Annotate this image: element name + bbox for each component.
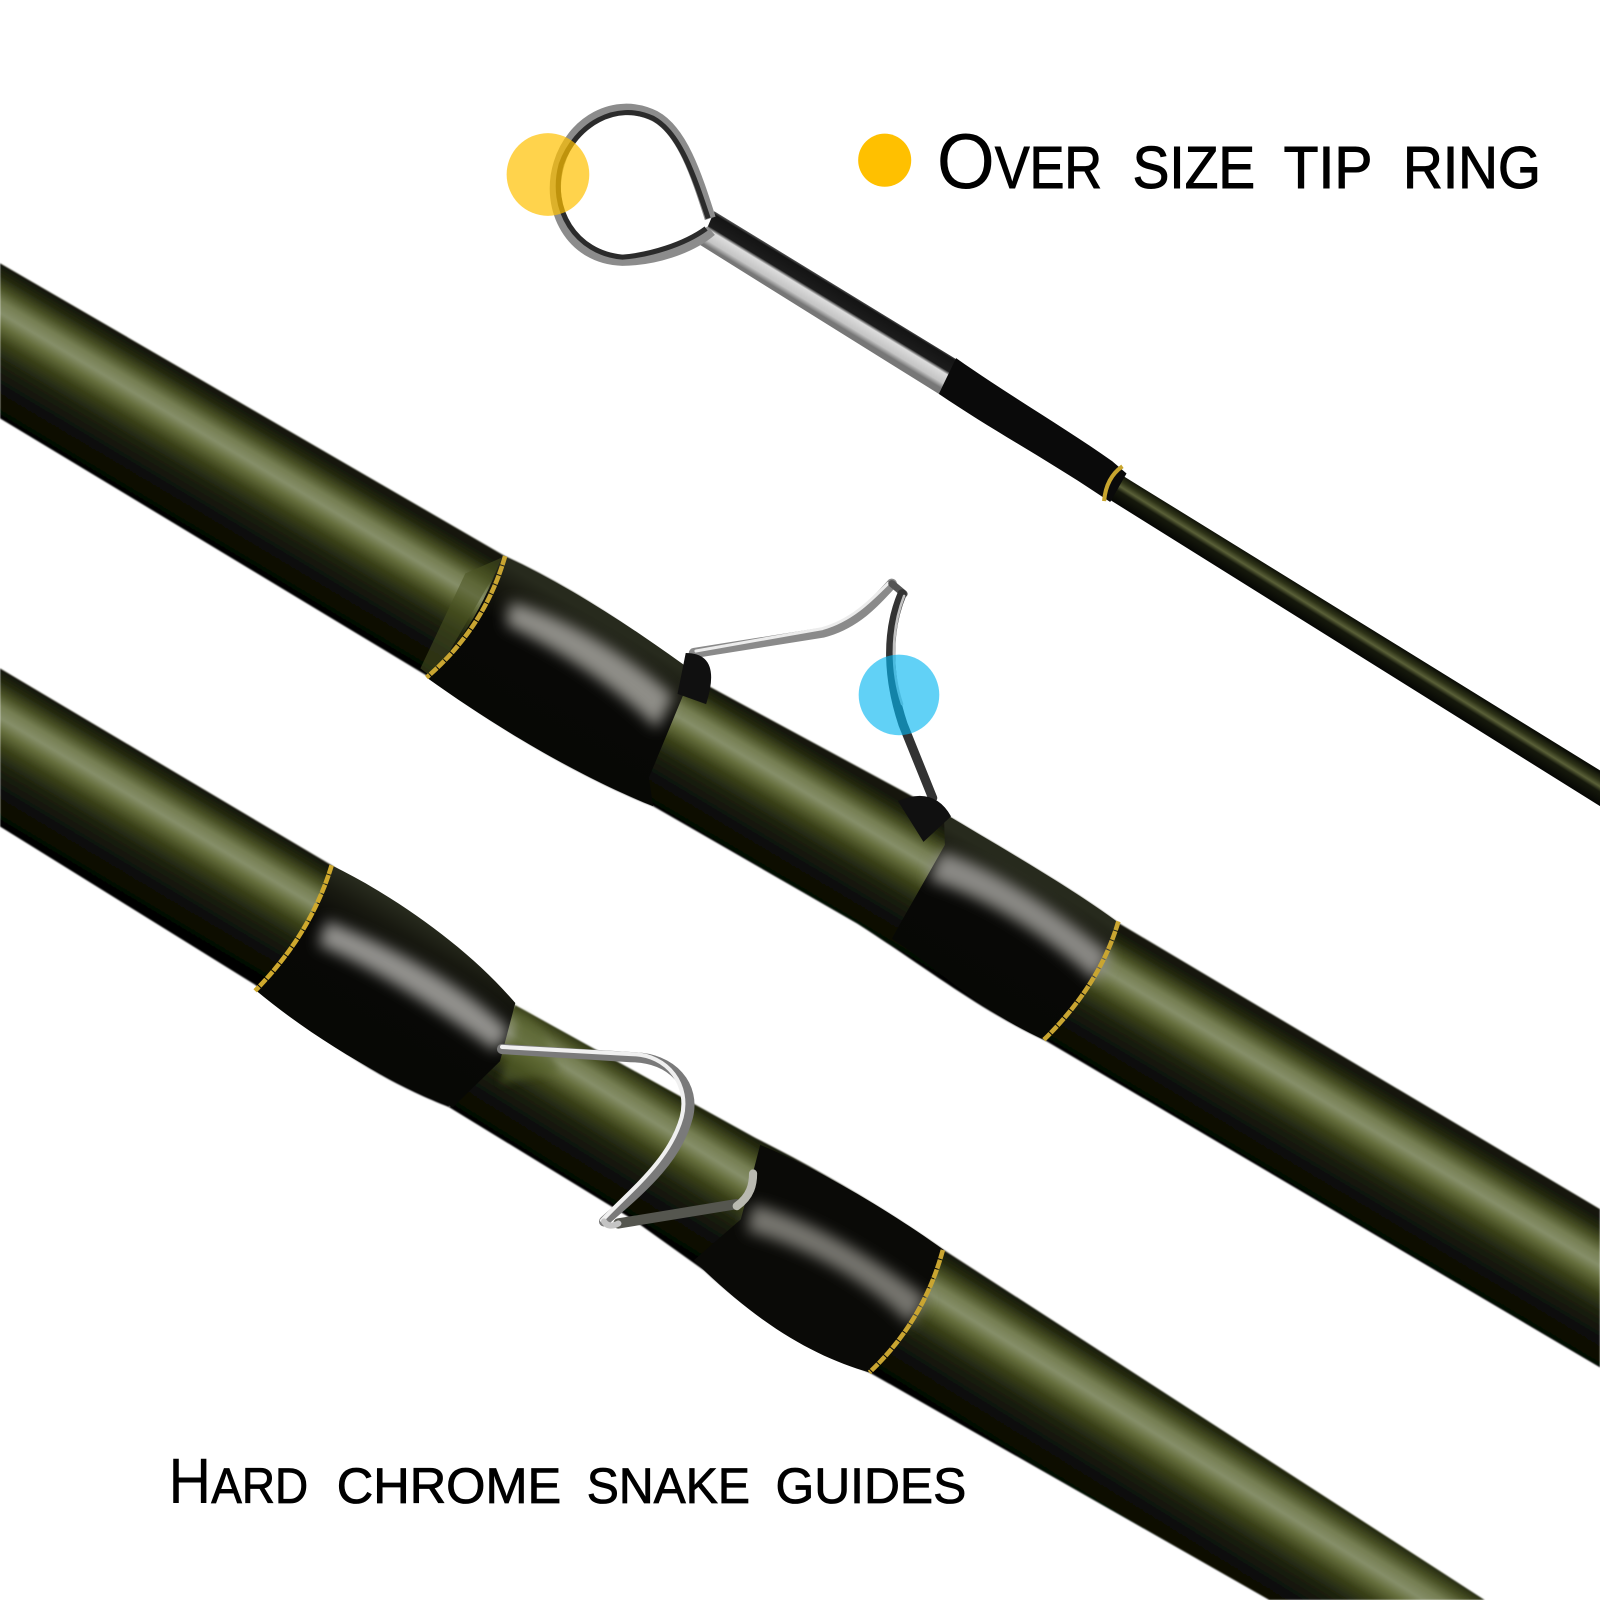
snake guide xyxy=(502,1047,753,1226)
black wrap one xyxy=(427,556,696,806)
black wrap four xyxy=(694,1145,944,1372)
label: over size tip ring: size xyxy=(1133,112,1255,206)
label: hard chrome snake guides: H xyxy=(168,1445,211,1517)
label: over size tip ring: tip xyxy=(1284,112,1372,206)
tip ring xyxy=(555,109,711,260)
label: over size tip ring: O xyxy=(937,119,995,205)
label: hard chrome snake guides: ard xyxy=(211,1439,308,1519)
wrap two highlight xyxy=(929,851,1110,982)
label: over size tip ring: ring xyxy=(1403,112,1541,206)
guide stem xyxy=(700,211,956,394)
rod blank right xyxy=(449,1005,1485,1600)
thin rod blank xyxy=(1110,476,1600,806)
black wrap two xyxy=(892,813,1119,1040)
label: over size tip ring: ver xyxy=(995,112,1102,206)
wrap one highlight xyxy=(506,602,673,729)
label: hard chrome snake guides: guides xyxy=(776,1439,966,1519)
lower rod section xyxy=(0,668,1485,1600)
olive patch beside wrap three xyxy=(500,1012,559,1084)
tip section of rod with oversize ring xyxy=(555,109,1600,806)
snake guide xyxy=(694,584,933,798)
black wrap three xyxy=(255,865,515,1107)
gold band four xyxy=(869,1250,943,1372)
olive underwrap left xyxy=(420,556,505,679)
middle rod section xyxy=(0,263,1600,1367)
label: hard chrome snake guides: chrome xyxy=(337,1439,561,1519)
label: hard chrome snake guides: snake xyxy=(587,1439,750,1519)
gold band one xyxy=(427,556,505,678)
marker: tip ring xyxy=(507,133,589,216)
gold band xyxy=(1104,466,1122,501)
rod blank xyxy=(0,263,1600,1367)
gold band two xyxy=(1044,921,1118,1040)
gold band three xyxy=(255,865,332,991)
guide glue feet xyxy=(678,653,951,842)
legend dot: tip ring xyxy=(858,134,911,187)
rod blank left xyxy=(0,668,515,1107)
black thread wrap xyxy=(939,358,1127,502)
wrap three highlight xyxy=(318,920,510,1051)
wrap four highlight xyxy=(747,1204,927,1324)
marker: snake guide xyxy=(859,655,939,735)
